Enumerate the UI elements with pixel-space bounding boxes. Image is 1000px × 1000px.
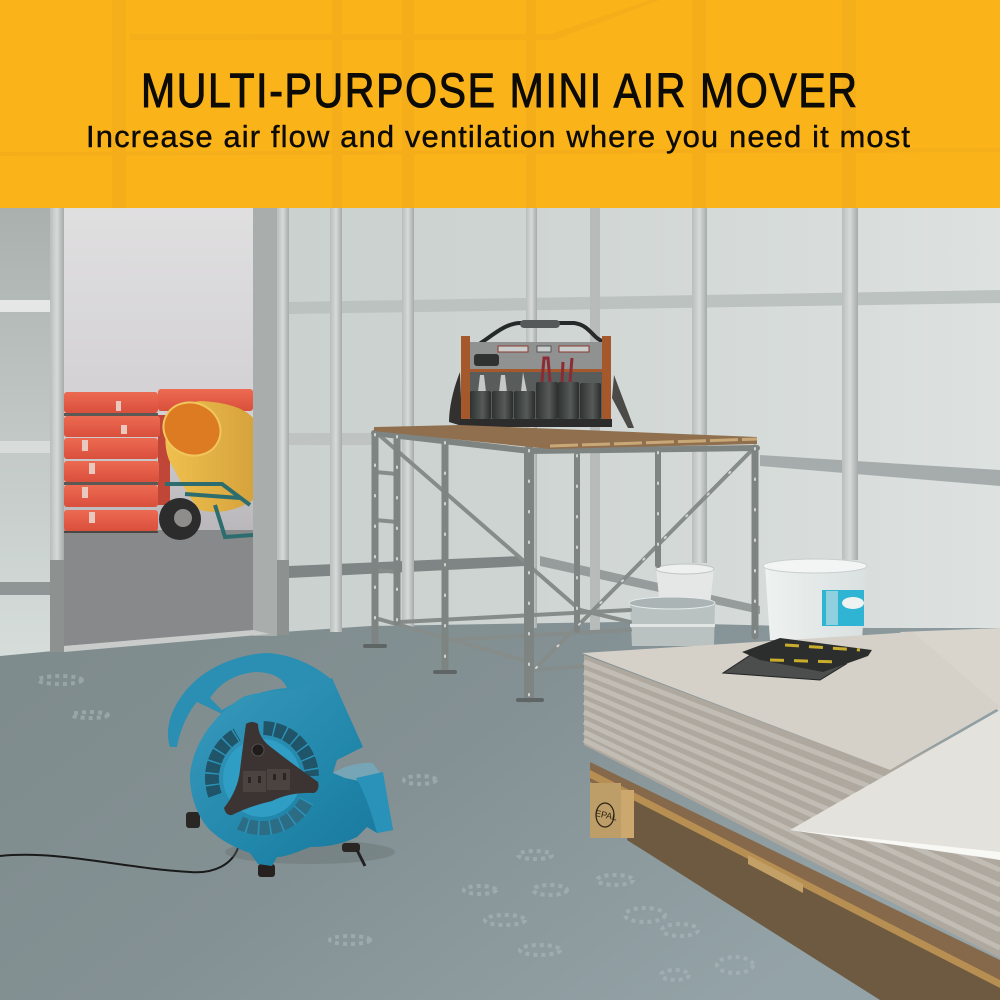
nozzle lighter top xyxy=(333,763,383,782)
drywall stack sides xyxy=(584,655,1000,958)
subtitle: Increase air flow and ventilation where you need it most xyxy=(86,119,910,154)
upper right sheet xyxy=(900,628,1000,712)
vent grilles xyxy=(212,728,312,828)
pallet: EPAL xyxy=(594,808,618,822)
header banner xyxy=(0,0,1000,208)
black triangular plate xyxy=(224,722,318,815)
blower shadow xyxy=(225,840,395,864)
title: MULTI-PURPOSE MINI AIR MOVER xyxy=(141,63,857,118)
tool bag on scaffold xyxy=(449,320,634,428)
feet xyxy=(186,812,365,877)
scene: construction room background xyxy=(0,208,1000,1000)
handle xyxy=(168,653,332,747)
small white pail xyxy=(656,564,714,606)
cement bags stack xyxy=(64,389,253,533)
nozzle collar xyxy=(356,772,393,833)
tool pouch on drywall xyxy=(723,638,872,680)
inner ring xyxy=(223,739,301,817)
cement mixer xyxy=(155,393,253,540)
scaffold wooden top xyxy=(374,425,757,449)
outlets xyxy=(243,769,290,792)
door pillar xyxy=(253,208,277,636)
scaffold table xyxy=(365,433,757,700)
air mover blower xyxy=(168,653,393,877)
wall: metal stud framing xyxy=(0,208,1000,652)
doorway: view into next room xyxy=(64,208,277,652)
pallet xyxy=(590,762,1000,1000)
reset switch xyxy=(252,744,264,756)
power cord xyxy=(0,848,238,872)
white front sheet xyxy=(790,710,1000,860)
buckets xyxy=(629,559,867,646)
white large bucket xyxy=(763,559,867,640)
drywall stack and pallet xyxy=(582,628,1000,1000)
drywall top sheet xyxy=(582,632,1000,770)
body xyxy=(190,678,393,866)
door threshold xyxy=(64,630,270,652)
floor footprints xyxy=(38,676,753,980)
grey paint can xyxy=(629,597,715,646)
